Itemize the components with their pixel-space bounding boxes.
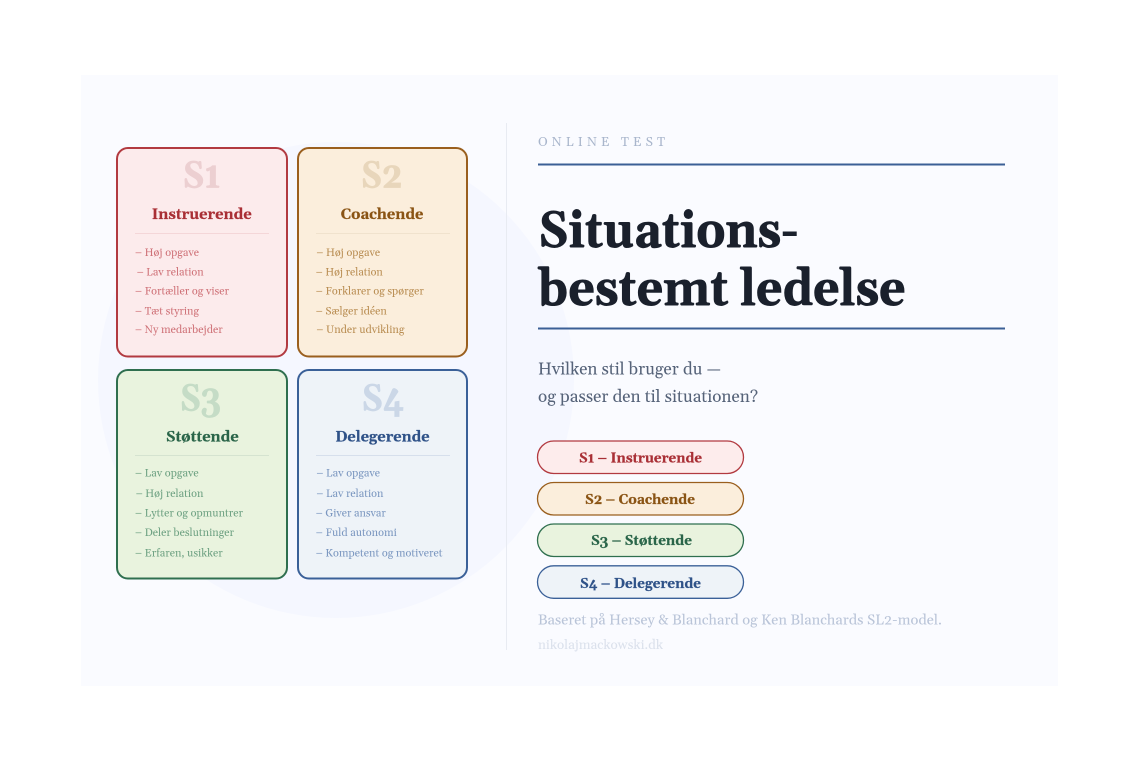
S3 heading: Støttende bbox=[166, 428, 239, 448]
S4 list: – Lav opgave bbox=[316, 467, 380, 481]
website: nikolajmackowski.dk bbox=[538, 638, 663, 654]
S2 list bbox=[316, 246, 424, 337]
panel: S4 Delegerende bbox=[298, 370, 467, 578]
panel: S3 Støttende bbox=[117, 370, 287, 578]
S4 list: – Kompetent og motiveret bbox=[316, 547, 443, 561]
S4 list bbox=[316, 467, 443, 561]
S1 numeral: S1 bbox=[183, 154, 221, 200]
panel: S2 Coachende bbox=[298, 148, 467, 356]
S3 list bbox=[135, 467, 243, 561]
pill: S4 bbox=[538, 566, 744, 598]
S4 heading: Delegerende bbox=[335, 428, 430, 448]
source note: Baseret på Hersey & Blanchard og Ken Blanchards SL2-model. bbox=[538, 612, 942, 630]
pill: S3: S3 – Støttende bbox=[591, 532, 692, 550]
pill: S2 bbox=[538, 482, 744, 515]
S4 numeral: S4 bbox=[362, 376, 404, 424]
S3 list: – Lytter og opmuntrer bbox=[135, 507, 243, 521]
background panel bbox=[81, 75, 1058, 686]
S1 list: – Tæt styring bbox=[135, 305, 199, 319]
panel: S1 Instruerende bbox=[117, 148, 287, 356]
S1 list: – Fortæller og viser bbox=[135, 284, 229, 298]
S1 list: – Lav relation bbox=[137, 266, 204, 280]
top rule bbox=[538, 164, 1005, 166]
S1 heading: Instruerende bbox=[152, 206, 252, 225]
S2 numeral: S2 bbox=[361, 154, 402, 200]
title: bestemt ledelse bbox=[538, 260, 906, 323]
title bbox=[538, 202, 906, 323]
bottom rule bbox=[538, 328, 1005, 330]
S2 list: – Sælger idéen bbox=[316, 305, 387, 319]
decorative circle bbox=[98, 142, 574, 618]
S1 list: – Høj opgave bbox=[135, 246, 199, 260]
S3 list: – Erfaren, usikker bbox=[135, 547, 223, 561]
S2 list: – Under udvikling bbox=[316, 323, 405, 337]
S3 list: – Høj relation bbox=[136, 487, 204, 501]
pill: S3 bbox=[538, 524, 744, 556]
S2 list: – Forklarer og spørger bbox=[316, 284, 424, 298]
S3 list: – Lav opgave bbox=[135, 467, 199, 481]
S4 list: – Lav relation bbox=[316, 487, 384, 501]
S3 numeral: S3 bbox=[180, 376, 221, 424]
S2 list: – Høj relation bbox=[316, 266, 383, 280]
S4 list: – Giver ansvar bbox=[316, 507, 386, 521]
pill: S2: S2 – Coachende bbox=[585, 491, 695, 509]
vertical divider bbox=[506, 123, 507, 650]
pill: S1: S1 – Instruerende bbox=[579, 450, 702, 468]
S4 list: – Fuld autonomi bbox=[316, 526, 398, 540]
subtitle: Hvilken stil bruger du — bbox=[538, 358, 721, 380]
S2 heading: Coachende bbox=[341, 206, 424, 225]
S1 list bbox=[135, 246, 229, 337]
pill: S1 bbox=[538, 441, 744, 474]
subtitle: og passer den til situationen? bbox=[538, 386, 758, 408]
eyebrow: online test: ONLINE TEST bbox=[538, 135, 665, 151]
subtitle bbox=[538, 358, 758, 408]
S3 list: – Deler beslutninger bbox=[135, 526, 234, 540]
pill: S4: S4 – Delegerende bbox=[580, 575, 701, 593]
S1 list: – Ny medarbejder bbox=[135, 323, 223, 337]
S2 list: – Høj opgave bbox=[316, 246, 380, 260]
title: Situations- bbox=[538, 202, 798, 265]
